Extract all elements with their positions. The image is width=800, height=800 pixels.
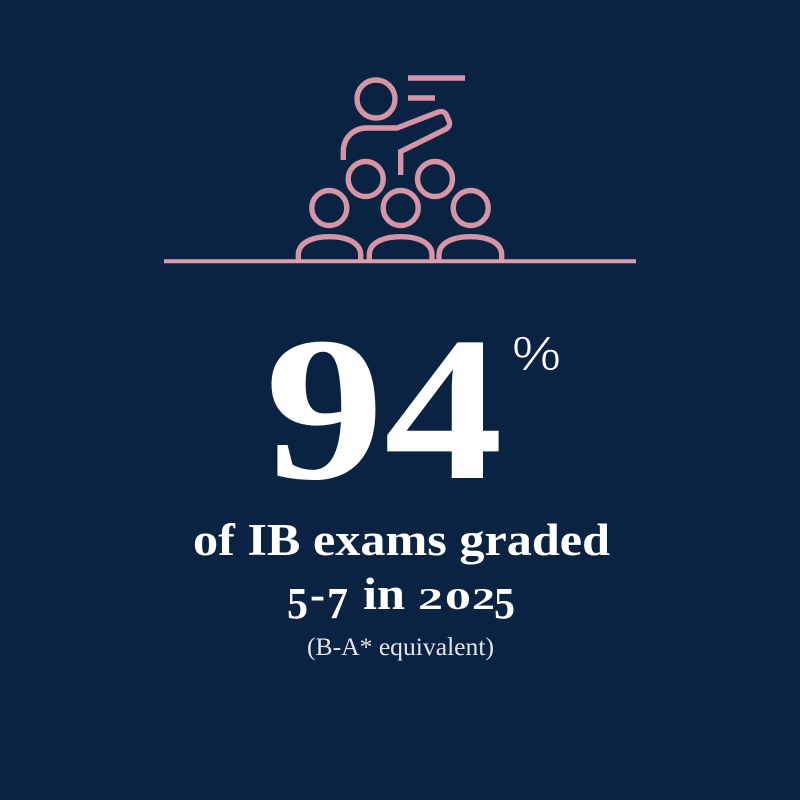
headline line 2: -	[310, 570, 325, 619]
headline line 2: in	[363, 568, 405, 619]
icon: teacher presenting to a class	[164, 78, 636, 261]
percent sign: %	[512, 328, 561, 381]
big statistic number: 94	[265, 294, 503, 523]
headline line 2: 0	[445, 581, 471, 616]
icon: presentation text lines	[408, 78, 465, 98]
headline line 1: of IB exams graded	[193, 515, 610, 565]
icon: teacher body and pointing arm	[343, 111, 450, 175]
headline line 2: 5	[494, 579, 515, 628]
equivalence note: (B-A* equivalent)	[307, 634, 494, 661]
icon: teacher head	[357, 80, 395, 118]
headline line 2	[287, 568, 515, 628]
headline line 2: 5	[287, 579, 308, 628]
headline line 2: 2	[472, 581, 495, 616]
icon: front row students	[298, 190, 502, 261]
icon: desk baseline	[164, 259, 636, 263]
headline line 2: 2	[418, 581, 443, 616]
headline line 2: 7	[327, 579, 348, 628]
icon: back row students	[348, 162, 452, 196]
